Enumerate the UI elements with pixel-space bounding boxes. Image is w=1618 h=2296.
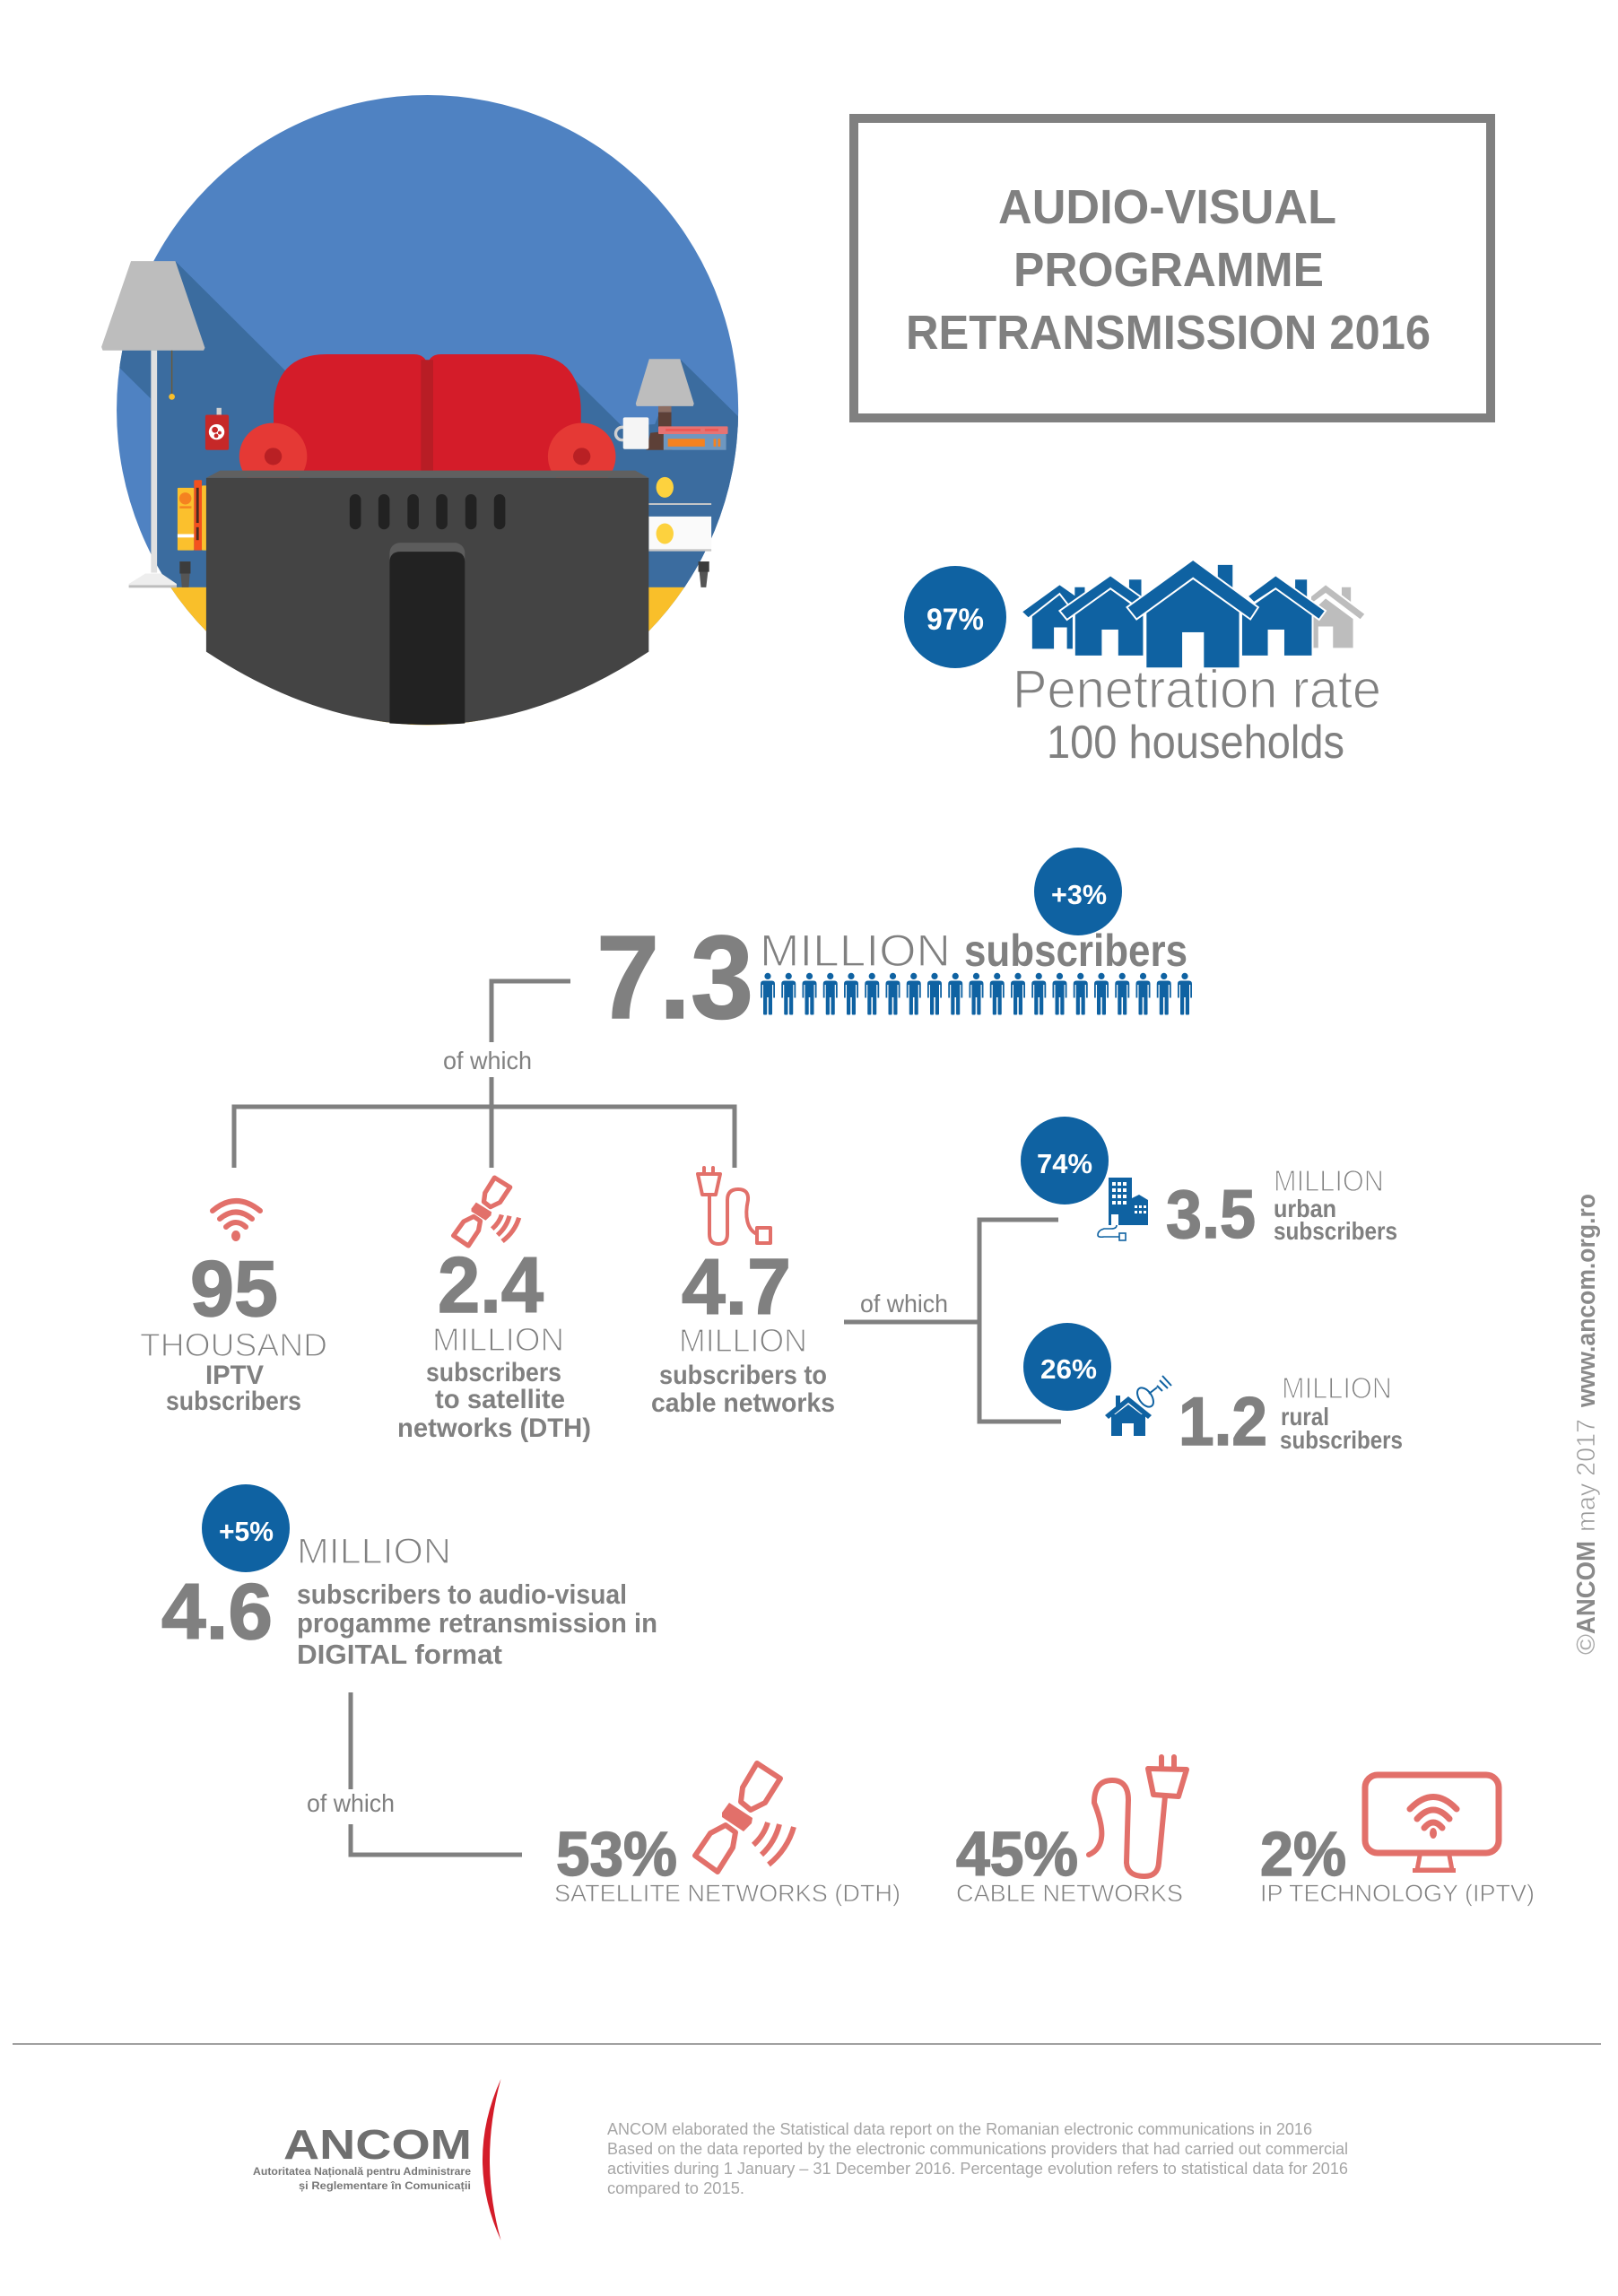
penetration rate block bbox=[904, 560, 1381, 769]
icon: plug and cable bbox=[698, 1168, 770, 1244]
credit: vertical source line: may 2017 bbox=[1572, 1419, 1601, 1532]
number: 95: 95 bbox=[190, 1244, 278, 1333]
urban subscribers bbox=[1021, 1117, 1397, 1253]
text: urban subscribers: subscribers bbox=[1274, 1217, 1397, 1245]
label: of which: of which bbox=[860, 1290, 948, 1318]
text: urban subscribers: urban bbox=[1274, 1195, 1336, 1222]
books on shelf bbox=[178, 480, 207, 587]
text: subscribers to satellite networks: to satellite bbox=[435, 1385, 565, 1414]
text: MILLION: MILLION bbox=[1274, 1164, 1384, 1197]
text: digital description: subscribers to audio-visual bbox=[297, 1578, 627, 1610]
text: subscribers to cable networks bbox=[651, 1361, 835, 1418]
badge: +3%: +3% bbox=[1051, 879, 1107, 910]
text: subscribers to satellite networks bbox=[397, 1358, 591, 1443]
number: 2%: 2% bbox=[1260, 1819, 1346, 1889]
icon: wifi bbox=[213, 1201, 260, 1239]
column: cable bbox=[651, 1168, 835, 1418]
text: MILLION: MILLION bbox=[297, 1532, 451, 1571]
text: digital description: DIGITAL format bbox=[297, 1639, 502, 1670]
footer note: activities during 1 January – 31 December 2016. Percentage evolution refers to statistical data for 2016 bbox=[607, 2160, 1348, 2178]
column: satellite bbox=[397, 1178, 591, 1443]
column: IPTV bbox=[140, 1201, 327, 1416]
heading: penetration rate: Penetration rate bbox=[1013, 659, 1381, 719]
illustration: living room with sofa and TV bbox=[101, 95, 739, 725]
footer logo: ANCOM bbox=[253, 2079, 500, 2240]
text: MILLION: MILLION bbox=[432, 1321, 564, 1358]
footer note: ANCOM elaborated the Statistical data report on the Romanian electronic communications in 2016 bbox=[607, 2120, 1312, 2138]
badge: 26% bbox=[1023, 1323, 1111, 1411]
digital subscribers block bbox=[161, 1484, 657, 1670]
footer note: compared to 2015. bbox=[607, 2179, 744, 2197]
credit: vertical source line: www.ancom.org.ro bbox=[1572, 1194, 1601, 1408]
number: 2.4: 2.4 bbox=[438, 1240, 544, 1329]
text: urban subscribers bbox=[1274, 1195, 1397, 1245]
text: rural subscribers bbox=[1280, 1403, 1403, 1454]
connector: cable split bbox=[844, 1220, 1061, 1422]
badge: 74% bbox=[1021, 1117, 1109, 1205]
text: 100 households: 100 households bbox=[1047, 717, 1344, 769]
title box: AUDIO-VISUAL bbox=[998, 180, 1336, 234]
number: 7.3: 7.3 bbox=[596, 911, 753, 1043]
credit: vertical source line bbox=[1572, 1194, 1601, 1655]
TV back bbox=[206, 471, 648, 725]
footer logo: ANCOM: Autoritatea Națională pentru Administrare bbox=[253, 2165, 471, 2178]
text: subscribers to cable networks: subscribers to bbox=[659, 1361, 827, 1390]
text: subscribers to cable networks: cable networks bbox=[651, 1388, 835, 1418]
text: IPTV subscribers: IPTV bbox=[205, 1361, 264, 1390]
text: cable networks: CABLE NETWORKS bbox=[956, 1880, 1183, 1907]
badge: +5%: +5% bbox=[219, 1516, 274, 1547]
icon: satellite bbox=[454, 1178, 519, 1246]
title box: PROGRAMME bbox=[1013, 243, 1324, 297]
footer logo: ANCOM: și Reglementare în Comunicații bbox=[299, 2179, 471, 2192]
label: of which: of which bbox=[443, 1047, 532, 1074]
credit: vertical source line: ANCOM bbox=[1572, 1541, 1601, 1634]
icon: row of houses bbox=[1022, 560, 1366, 669]
number: 1.2: 1.2 bbox=[1179, 1384, 1267, 1460]
stat: IP technology share bbox=[1260, 1775, 1535, 1907]
floor lamp bbox=[101, 261, 204, 587]
text: MILLION: MILLION bbox=[679, 1322, 807, 1359]
label: of which: of which bbox=[307, 1789, 395, 1817]
icon: monitor with wifi bbox=[1365, 1775, 1499, 1873]
number: 4.6: 4.6 bbox=[161, 1567, 273, 1656]
text: subscribers: subscribers bbox=[964, 926, 1187, 976]
icon: house with satellite dish bbox=[1105, 1376, 1171, 1436]
text: IPTV subscribers bbox=[166, 1361, 301, 1416]
title box: RETRANSMISSION 2016 bbox=[906, 306, 1431, 360]
number: 45%: 45% bbox=[956, 1819, 1078, 1889]
footer note bbox=[607, 2120, 1348, 2197]
side table with lamp, mug and books bbox=[615, 359, 728, 587]
badge: 74%: 74% bbox=[1037, 1148, 1092, 1179]
text: subscribers to satellite networks: networks (DTH) bbox=[397, 1413, 591, 1443]
icon: plug and cable bbox=[1089, 1757, 1187, 1876]
text: THOUSAND: THOUSAND bbox=[140, 1326, 327, 1363]
text: IP technology: IP TECHNOLOGY (IPTV) bbox=[1260, 1880, 1535, 1907]
title box bbox=[854, 118, 1491, 418]
badge: 97%: 97% bbox=[926, 603, 984, 637]
icon: satellite bbox=[695, 1763, 794, 1872]
pictogram: row of people bbox=[761, 973, 1192, 1015]
footer divider bbox=[13, 2043, 1601, 2045]
text: IPTV subscribers: subscribers bbox=[166, 1387, 301, 1416]
footer note: Based on the data reported by the electronic communications providers that had carried out commercial bbox=[607, 2140, 1348, 2158]
stat: cable share bbox=[956, 1757, 1187, 1907]
number: 53%: 53% bbox=[556, 1819, 677, 1889]
number: 3.5: 3.5 bbox=[1166, 1177, 1256, 1253]
badge: +5% bbox=[202, 1484, 290, 1572]
sofa bbox=[239, 354, 615, 490]
badge: +3% bbox=[1034, 848, 1122, 935]
text: subscribers to satellite networks: subscribers bbox=[426, 1358, 561, 1387]
text: digital description: progamme retransmission in bbox=[297, 1607, 657, 1639]
badge: 26%: 26% bbox=[1040, 1353, 1097, 1385]
badge: 97% bbox=[904, 566, 1006, 668]
text: rural subscribers: rural bbox=[1281, 1403, 1329, 1431]
text: MILLION: MILLION bbox=[1282, 1371, 1392, 1405]
text: digital description bbox=[297, 1578, 657, 1670]
connector: digital split bbox=[307, 1692, 522, 1855]
credit: vertical source line: © bbox=[1572, 1634, 1601, 1655]
icon: city buildings with plug bbox=[1098, 1178, 1148, 1240]
text: MILLION: MILLION bbox=[760, 926, 951, 976]
stat: satellite share bbox=[554, 1763, 900, 1907]
number: 4.7: 4.7 bbox=[682, 1242, 791, 1331]
total subscribers block bbox=[596, 848, 1192, 1043]
connector: total to three networks bbox=[234, 981, 735, 1168]
footer logo: ANCOM: ANCOM bbox=[283, 2121, 472, 2168]
text: rural subscribers: subscribers bbox=[1280, 1426, 1403, 1454]
text: satellite networks: SATELLITE NETWORKS (DTH) bbox=[554, 1880, 900, 1907]
soda can bbox=[205, 408, 229, 450]
rural subscribers bbox=[1023, 1323, 1403, 1460]
